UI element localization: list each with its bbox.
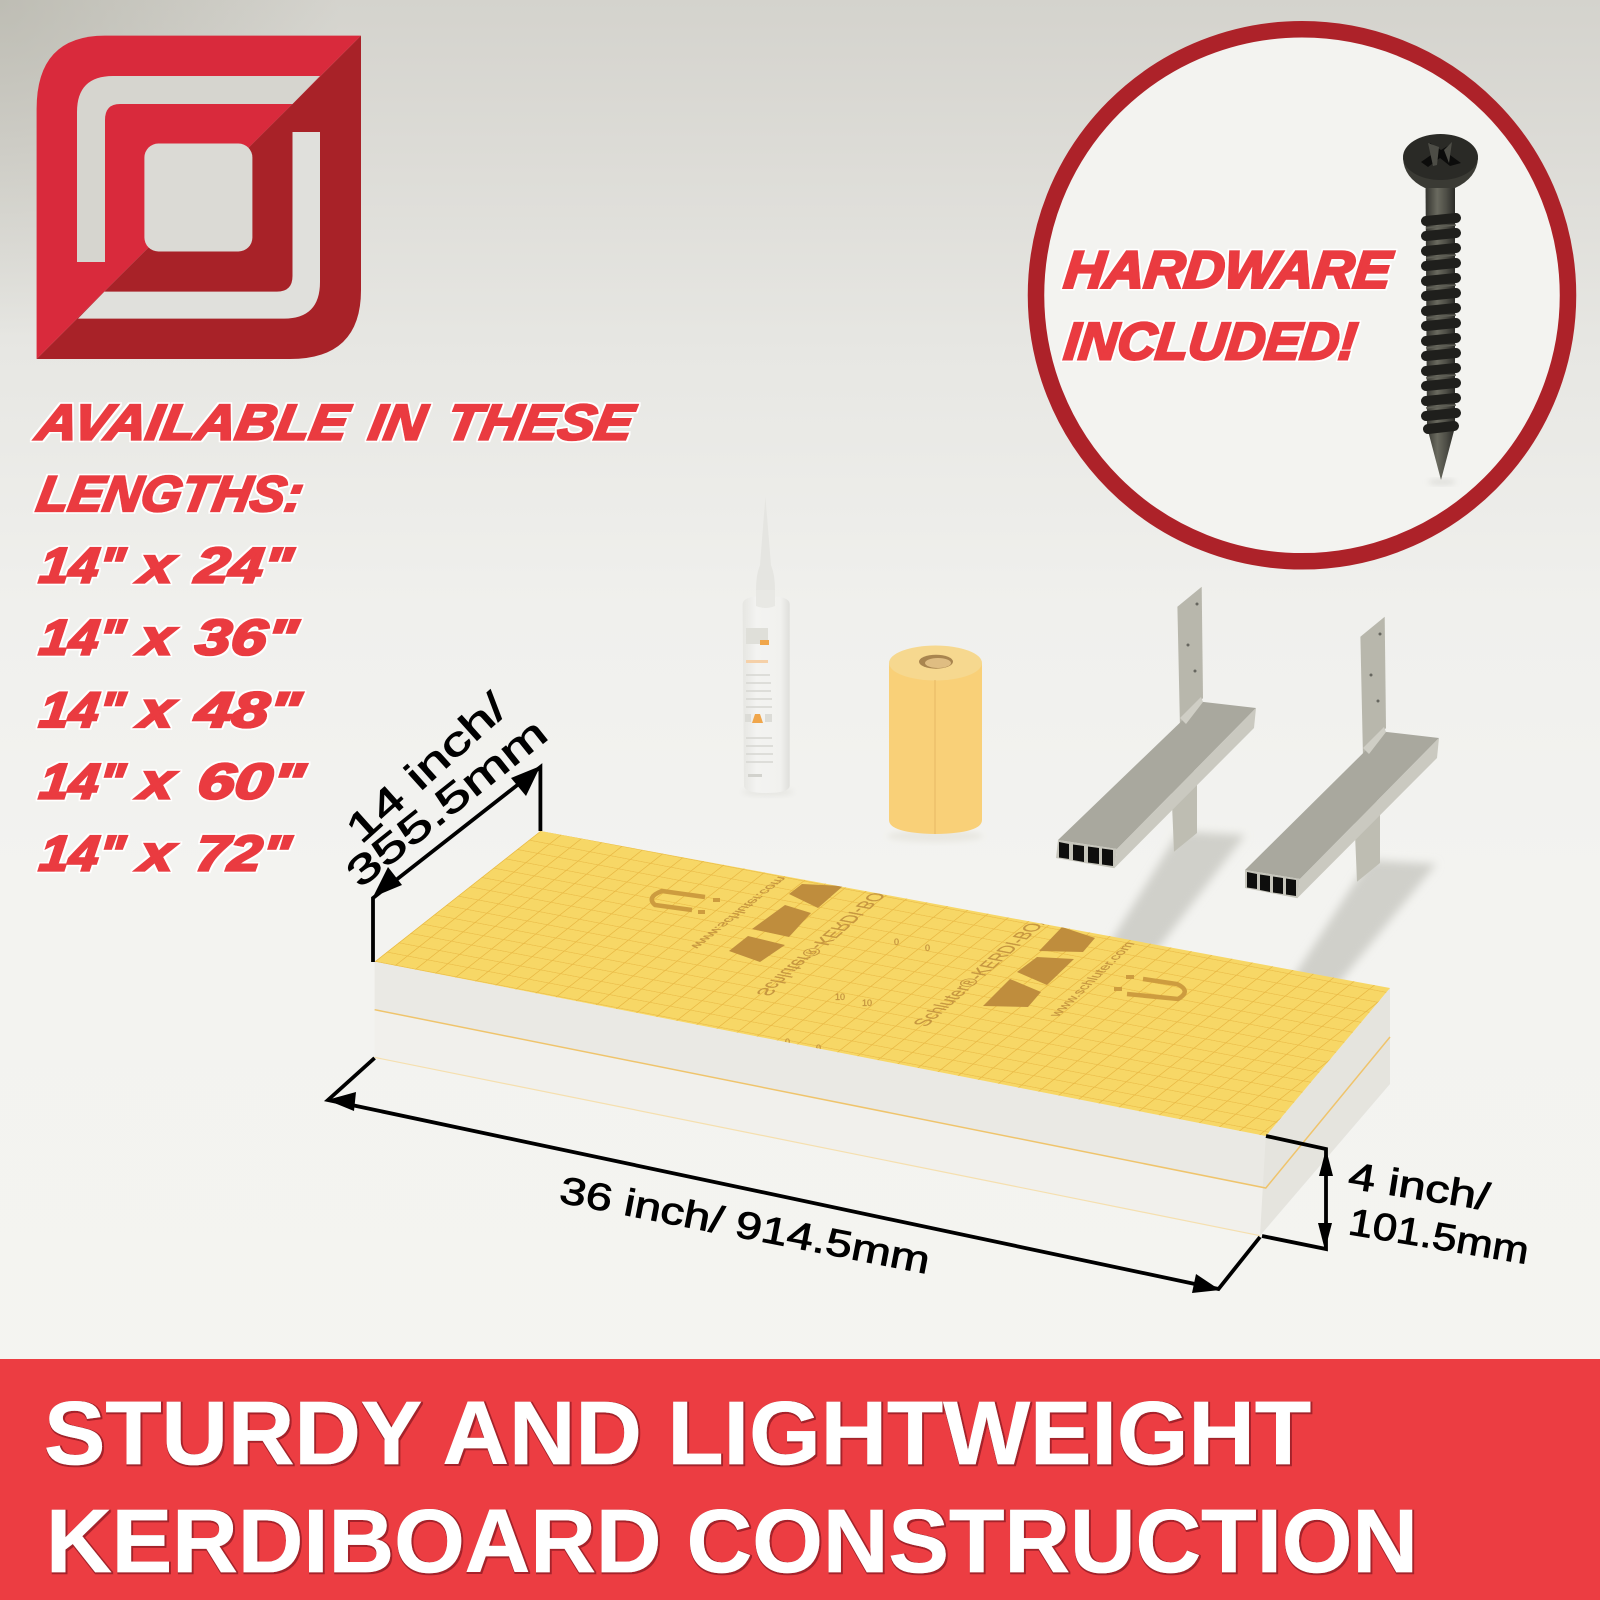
dimension label: 4 inch/ [1346, 1155, 1493, 1219]
print: board text: 0 [785, 1037, 790, 1047]
size: 14 x 48: 14" [37, 682, 129, 738]
banner title: KERDIBOARD CONSTRUCTION [46, 1492, 1418, 1592]
size: 14 x 36: 14" [37, 610, 129, 665]
callout text [1062, 242, 1396, 371]
upper plate [1177, 587, 1203, 728]
front face [375, 962, 1266, 1188]
membrane roll [887, 646, 983, 842]
heading: available lengths [31, 394, 640, 881]
size: 14 x 60: 60" [195, 754, 309, 809]
dimension: height 4 inch [1262, 1136, 1532, 1273]
dimension label: 355.5mm [338, 710, 556, 896]
text: lengths: LENGTHS: [33, 465, 308, 522]
print: board text [686, 869, 1139, 1053]
size: 14 x 72: 72" [193, 826, 295, 881]
dimension label: 14 inch/ [338, 684, 517, 852]
banner title: STURDY AND LIGHTWEIGHT [44, 1384, 1311, 1484]
print: board text: www.schluter.com [1046, 941, 1139, 1018]
nozzle [756, 497, 775, 603]
right face [1260, 988, 1390, 1236]
orange seams [375, 1010, 1390, 1188]
print: board text: Schluter®-KERDI-BOARD [750, 869, 917, 997]
dimension: width 14 inch [338, 684, 556, 962]
kerdi board [360, 820, 1400, 1236]
dimension label [338, 684, 556, 896]
size: 14 x 24: 14" [37, 538, 129, 593]
top face [375, 831, 1390, 1136]
tube label [745, 628, 773, 777]
dimension label: 101.5mm [1346, 1201, 1532, 1273]
banner [0, 1359, 1600, 1600]
print: board text: 0 [925, 943, 930, 953]
size: 14 x 36: x [133, 610, 180, 665]
dimension label [1346, 1155, 1532, 1273]
print: board text: www.schluter.com [686, 876, 791, 950]
print: board text: 0 [816, 1043, 821, 1053]
lower plate [1171, 770, 1197, 852]
size: 14 x 24: 24" [191, 538, 297, 593]
grid [375, 831, 1386, 1135]
size: 14 x 60: 14" [37, 754, 129, 809]
print: board text: 10 [862, 998, 872, 1008]
print: board text: 10 [835, 992, 845, 1002]
size: 14 x 48: 48" [191, 682, 305, 738]
dimension label: 36 inch/ 914.5mm [556, 1170, 933, 1283]
core hole [919, 655, 953, 669]
logo [37, 36, 361, 359]
print: magnet icons [652, 891, 1185, 999]
beam side [1114, 708, 1256, 868]
print: board text: 0 [894, 937, 899, 947]
size: 14 x 48: x [133, 682, 180, 738]
sealant tube [742, 497, 794, 796]
beam top [1058, 702, 1256, 849]
size: 14 x 72: 14" [37, 826, 129, 881]
print: logo marks [729, 884, 1095, 1007]
callout: hardware included [1036, 29, 1568, 561]
bracket shadows [1090, 831, 1436, 1000]
dimension: length 36 inch [327, 1058, 1260, 1293]
size: 14 x 60: x [133, 754, 180, 809]
size: 14 x 24: x [133, 538, 180, 593]
text: available in these: AVAILABLE IN THESE [31, 394, 640, 450]
tube body [743, 596, 790, 793]
beam end [1056, 840, 1117, 868]
print: board text: Schluter®-KERDI-BOARD [908, 899, 1074, 1028]
icon: screw [1403, 134, 1478, 485]
banner title [44, 1384, 1418, 1592]
bracket right [1245, 617, 1439, 898]
size: 14 x 36: 36" [193, 610, 302, 665]
callout text: HARDWARE [1062, 242, 1396, 299]
bracket left [1056, 587, 1256, 868]
size: 14 x 72: x [133, 826, 180, 881]
callout text: INCLUDED! [1062, 313, 1360, 371]
